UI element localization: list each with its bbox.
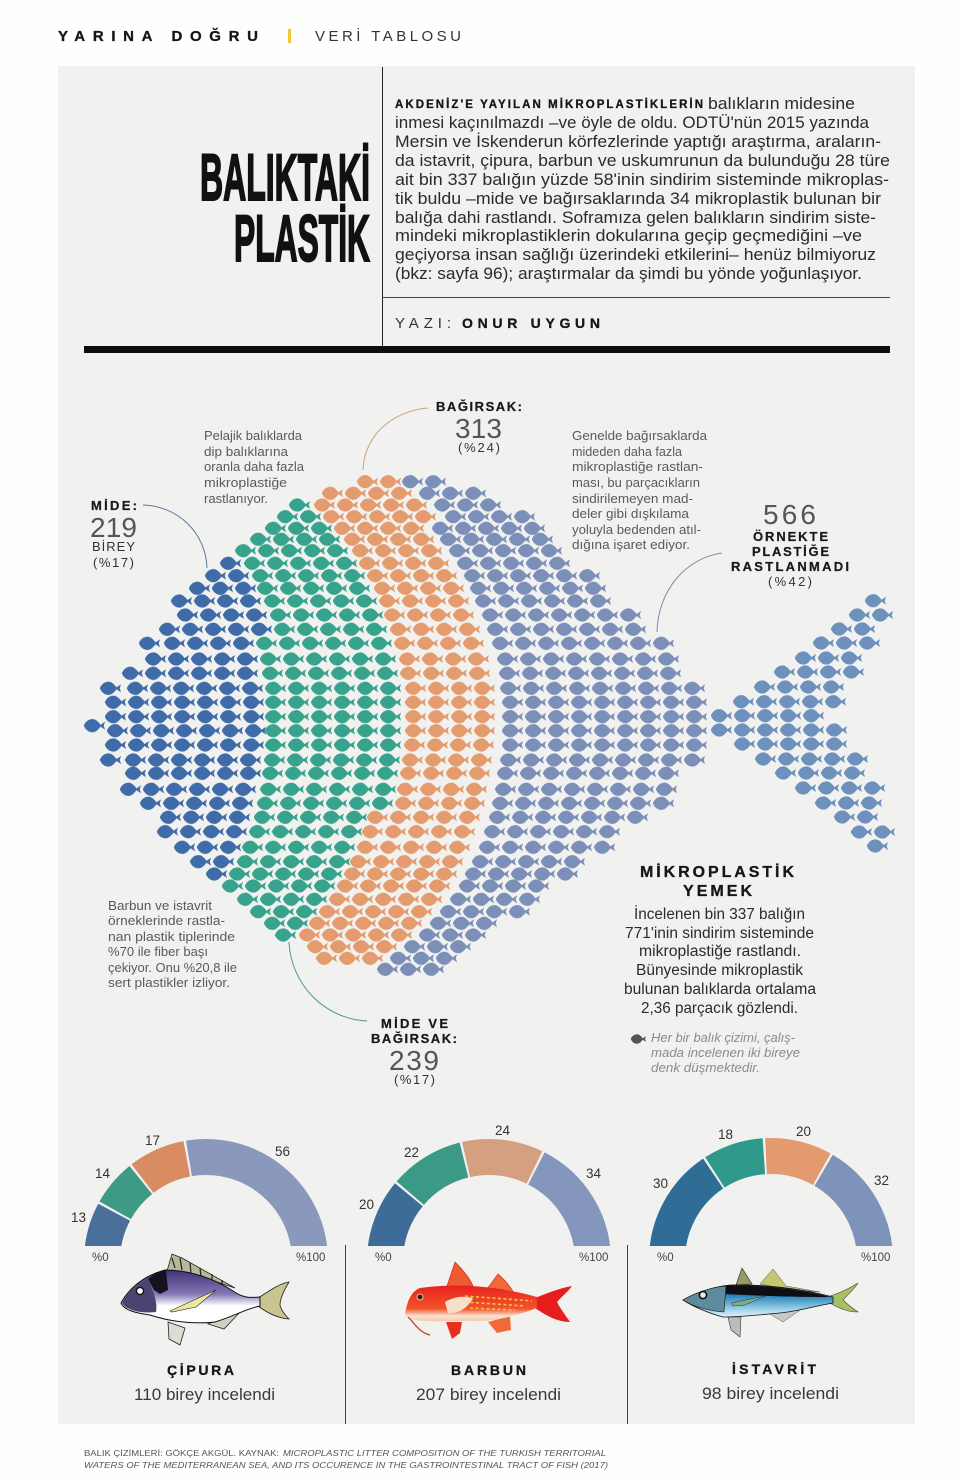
text block: mikroplastik yemek: bulunan balıklarda ortalama bbox=[624, 981, 816, 998]
illustration: istavrit fish bbox=[683, 1268, 858, 1337]
callout: bağırsak: 313 bbox=[455, 413, 502, 444]
callout: mide bbox=[90, 498, 207, 570]
gauge: çipura: %0 bbox=[92, 1252, 109, 1264]
intro text block: ait bin 337 balığın yüzde 58'inin sindirim sisteminde mikroplas- bbox=[395, 171, 889, 189]
label: barbun bbox=[416, 1362, 561, 1404]
gauge: çipura: 56 bbox=[275, 1144, 290, 1159]
source credit: BALIK ÇİZİMLERİ: GÖKÇE AKGÜL. KAYNAK: bbox=[84, 1448, 279, 1458]
gauge: barbun: %0 bbox=[375, 1252, 392, 1264]
page header: YARINA DOĞRU bbox=[58, 27, 258, 45]
illustration: çipura fish bbox=[121, 1254, 289, 1345]
gauge: istavrit: 20 bbox=[796, 1124, 811, 1139]
callout: mide ve bağırsak bbox=[289, 942, 457, 1087]
note: plastic types bbox=[108, 899, 237, 990]
intro text block: balıkların midesine bbox=[708, 95, 855, 113]
note: pelagic fish: mikroplastiğe bbox=[204, 476, 287, 490]
intro text block: balığa dahi rastlandı. Soframıza gelen balıkların sindirim siste- bbox=[395, 209, 876, 227]
gauge: istavrit: %100 bbox=[861, 1252, 890, 1264]
callout: mide: 219 bbox=[90, 512, 137, 543]
intro frame lines bbox=[382, 67, 890, 347]
gauge: barbun: 34 bbox=[586, 1166, 602, 1181]
intro text block: (bkz: sayfa 96); araştırmalar da şimdi bu yönde yoğunlaşıyor. bbox=[395, 265, 862, 283]
callout: no plastic found: PLASTİĞE bbox=[752, 544, 829, 559]
intro text block: mindeki mikroplastiklerin dokularına geçip geçmediğini –ve bbox=[395, 227, 862, 245]
note: intestine: dığına işaret ediyor. bbox=[572, 538, 690, 552]
gauge: barbun: %100 bbox=[579, 1252, 608, 1264]
note: pelagic fish: oranla daha fazla bbox=[204, 460, 304, 474]
intro text block: da istavrit, çipura, barbun ve uskumrunun da bulunduğu 28 türe bbox=[395, 152, 890, 170]
gauge: istavrit: %0 bbox=[657, 1252, 674, 1264]
source credit bbox=[84, 1448, 608, 1470]
text: BALIKTAKİ bbox=[200, 140, 370, 214]
gauge: çipura: %100 bbox=[296, 1252, 325, 1264]
note: pelagic fish: rastlanıyor. bbox=[204, 492, 268, 506]
page header: VERİ TABLOSU bbox=[315, 27, 461, 45]
label: çipura: ÇİPURA bbox=[167, 1362, 234, 1378]
legend bbox=[631, 1031, 800, 1075]
gauge: barbun: 24 bbox=[495, 1123, 511, 1138]
note: pelagic fish bbox=[204, 429, 304, 506]
text block: mikroplastik yemek: MİKROPLASTİK bbox=[640, 863, 794, 881]
byline: YAZI: bbox=[395, 315, 451, 332]
gauge: istavrit bbox=[653, 1124, 890, 1264]
intro text block: geçiyorsa insan sağlığı üzerindeki etkilerini– henüz bilmiyoruz bbox=[395, 246, 876, 264]
callout: no plastic found: 566 bbox=[763, 499, 816, 530]
fish group: no plastic, body bbox=[376, 475, 708, 976]
callout: bağırsak: BAĞIRSAK: bbox=[436, 399, 522, 414]
fish group: stomach and intestine bbox=[222, 498, 402, 942]
callout: mide ve bağırsak: BAĞIRSAK: bbox=[371, 1031, 457, 1046]
gauge: çipura bbox=[71, 1133, 325, 1264]
thick divider bbox=[84, 346, 890, 353]
note: plastic types: örneklerinde rastla- bbox=[108, 914, 225, 928]
intro text block: tik buldu –mide ve bağırsaklarında 34 mikroplastik bulunan bir bbox=[395, 190, 882, 208]
note: pelagic fish: dip balıklarına bbox=[204, 445, 288, 459]
source credit: WATERS OF THE MEDITERRANEAN SEA, AND ITS OCCURENCE IN THE GASTROINTESTINAL TRACT OF FISH (2017) bbox=[84, 1460, 608, 1470]
byline: ONUR UYGUN bbox=[462, 315, 600, 331]
column dividers bbox=[345, 1245, 628, 1424]
fish group: no plastic, tail bbox=[710, 594, 896, 853]
gauge: barbun: 20 bbox=[359, 1197, 374, 1212]
gauge: çipura: 13 bbox=[71, 1210, 86, 1225]
note: plastic types: sert plastikler izliyor. bbox=[108, 976, 230, 990]
callout: mide: MİDE: bbox=[91, 498, 137, 513]
illustration: barbun fish bbox=[405, 1262, 572, 1339]
byline bbox=[395, 315, 600, 332]
callout: mide ve bağırsak: (%17) bbox=[394, 1072, 435, 1087]
callout: no plastic found: ÖRNEKTE bbox=[753, 529, 828, 544]
gauge: istavrit: 32 bbox=[874, 1173, 889, 1188]
callout: mide ve bağırsak: MİDE VE bbox=[381, 1016, 448, 1031]
gauge: çipura: 14 bbox=[95, 1166, 111, 1181]
note: intestine: ması, bu parçacıkların bbox=[572, 476, 700, 490]
intro text block: Mersin ve İskenderun körfezlerinde yaptığı araştırma, araların- bbox=[395, 132, 881, 151]
intro text block: inmesi kaçınılmazdı –ve öyle de oldu. ODTÜ'nün 2015 yazında bbox=[395, 114, 870, 132]
note: intestine: Genelde bağırsaklarda bbox=[572, 429, 707, 443]
fish group: stomach (mide) bbox=[84, 556, 274, 881]
text block: mikroplastik yemek: Bünyesinde mikroplastik bbox=[636, 962, 803, 979]
label: istavrit bbox=[702, 1361, 839, 1403]
note: pelagic fish: Pelajik balıklarda bbox=[204, 429, 302, 443]
text block: mikroplastik yemek: YEMEK bbox=[683, 883, 752, 900]
source credit: MICROPLASTIC LITTER COMPOSITION OF THE TURKISH TERRITORIAL bbox=[283, 1448, 606, 1458]
note: plastic types: %70 ile fiber başı bbox=[108, 945, 208, 959]
note: plastic types: çekiyor. Onu %20,8 ile bbox=[108, 961, 237, 975]
note: intestine: sindirilemeyen mad- bbox=[572, 492, 693, 506]
callout: bağırsak bbox=[363, 399, 522, 470]
label: istavrit: 98 birey incelendi bbox=[702, 1384, 839, 1403]
label: barbun: 207 birey incelendi bbox=[416, 1385, 561, 1404]
intro text block bbox=[395, 95, 890, 283]
callout: mide: (%17) bbox=[93, 555, 134, 570]
callout: mide: BİREY bbox=[92, 539, 135, 554]
legend: denk düşmektedir. bbox=[651, 1061, 760, 1075]
title bbox=[200, 140, 370, 275]
callout: no plastic found: (%42) bbox=[768, 574, 812, 589]
label: çipura bbox=[134, 1362, 275, 1404]
label: barbun: BARBUN bbox=[451, 1362, 526, 1378]
text block: mikroplastik yemek: mikroplastiğe rastlandı. bbox=[639, 943, 801, 960]
text block: mikroplastik yemek: 771'inin sindirim sisteminde bbox=[625, 925, 814, 942]
fish group: intestine bbox=[298, 475, 496, 965]
note: plastic types: nan plastik tiplerinde bbox=[108, 930, 235, 944]
callout: bağırsak: (%24) bbox=[458, 440, 500, 455]
legend: mada incelenen iki bireye bbox=[651, 1046, 800, 1060]
note: intestine: yoluyla bedenden atıl- bbox=[572, 523, 701, 537]
callout: mide ve bağırsak: 239 bbox=[389, 1045, 439, 1076]
legend: Her bir balık çizimi, çalış- bbox=[651, 1031, 795, 1045]
text: PLASTİK bbox=[234, 201, 370, 275]
note: plastic types: Barbun ve istavrit bbox=[108, 899, 213, 913]
text block: mikroplastik yemek bbox=[624, 863, 816, 1017]
intro text block: AKDENİZ'E YAYILAN MİKROPLASTİKLERİN bbox=[395, 98, 703, 111]
label: çipura: 110 birey incelendi bbox=[134, 1385, 275, 1404]
note: intestine: deler gibi dışkılama bbox=[572, 507, 689, 521]
gauge: barbun bbox=[359, 1123, 608, 1264]
note: intestine: mideden daha fazla bbox=[572, 445, 682, 459]
callout: no plastic found bbox=[657, 499, 849, 632]
gauge: istavrit: 30 bbox=[653, 1176, 668, 1191]
note: intestine bbox=[572, 429, 707, 552]
label: istavrit: İSTAVRİT bbox=[732, 1361, 816, 1377]
text block: mikroplastik yemek: İncelenen bin 337 balığın bbox=[634, 905, 805, 923]
callout: no plastic found: RASTLANMADI bbox=[731, 559, 849, 574]
gauge: istavrit: 18 bbox=[718, 1127, 733, 1142]
note: intestine: mikroplastiğe rastlan- bbox=[572, 460, 703, 474]
gauge: çipura: 17 bbox=[145, 1133, 160, 1148]
text block: mikroplastik yemek: 2,36 parçacık gözlendi. bbox=[641, 1000, 798, 1017]
chart: fish made of small fish bbox=[84, 475, 896, 976]
page header bbox=[58, 27, 461, 45]
gauge: barbun: 22 bbox=[404, 1145, 419, 1160]
